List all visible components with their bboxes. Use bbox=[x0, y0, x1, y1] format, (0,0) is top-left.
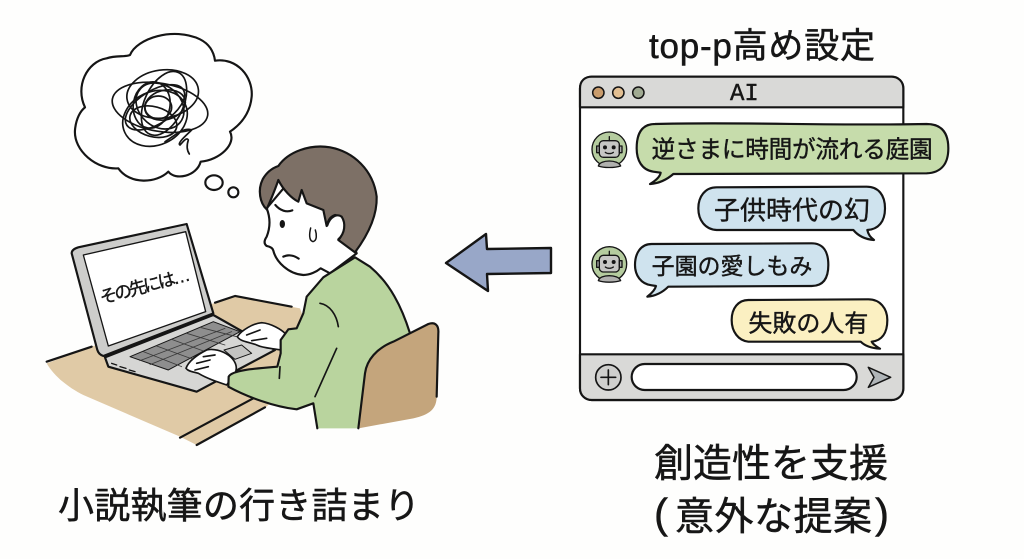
person bbox=[186, 147, 410, 428]
bubble 1: 逆さまに時間が流れる庭園 bbox=[652, 136, 933, 163]
thought cloud bbox=[75, 34, 252, 197]
input field bbox=[632, 364, 857, 390]
ear bbox=[327, 215, 344, 239]
window controls bbox=[593, 87, 644, 98]
keyboard bbox=[130, 322, 240, 370]
caption line 2: ( bbox=[654, 490, 668, 537]
arrow bbox=[446, 234, 551, 291]
chat window bbox=[580, 77, 948, 400]
near hand bbox=[186, 349, 236, 385]
face bbox=[265, 177, 357, 275]
chair bbox=[358, 323, 438, 428]
far hand bbox=[237, 323, 285, 350]
trackpad bbox=[224, 345, 252, 359]
eyebrow, eye, mouth, sweat bbox=[275, 205, 316, 259]
caption line 1: 創造性を支援 bbox=[654, 443, 888, 486]
base bbox=[105, 315, 275, 392]
bubble 3: 子園の愛しもみ bbox=[652, 253, 812, 279]
caption line 2: ) bbox=[875, 490, 889, 537]
bubble 4 bbox=[732, 299, 887, 349]
window title: AI bbox=[730, 81, 759, 108]
screen bbox=[83, 232, 206, 346]
robot avatar 2 bbox=[592, 247, 627, 282]
laptop bbox=[72, 224, 275, 392]
lid bbox=[72, 224, 213, 356]
ports bbox=[112, 363, 135, 372]
caption: supports creativity bbox=[654, 443, 889, 539]
tangled scribble bbox=[108, 64, 212, 157]
bubble 3 bbox=[635, 243, 828, 297]
bubble 2 bbox=[698, 187, 885, 240]
screen text: その先には… bbox=[98, 265, 192, 308]
desk bbox=[47, 296, 317, 445]
caption line 2: 意外な提案 bbox=[675, 496, 872, 539]
window frame bbox=[580, 77, 903, 400]
robot avatar 1 bbox=[592, 132, 627, 167]
caption: writer's block: 小説執筆の行き詰まり bbox=[58, 485, 420, 526]
bubble 1 bbox=[637, 123, 948, 184]
send icon bbox=[868, 367, 891, 387]
bubble 4: 失敗の人有 bbox=[748, 310, 868, 337]
add button bbox=[596, 365, 621, 390]
heading: top-p: top-p高め設定 bbox=[649, 27, 875, 66]
bubble 2: 子供時代の幻 bbox=[714, 195, 870, 225]
shirt folds bbox=[279, 303, 338, 397]
hair bbox=[260, 147, 377, 252]
shirt bbox=[228, 257, 410, 428]
illustration: writer at laptop bbox=[47, 34, 438, 445]
